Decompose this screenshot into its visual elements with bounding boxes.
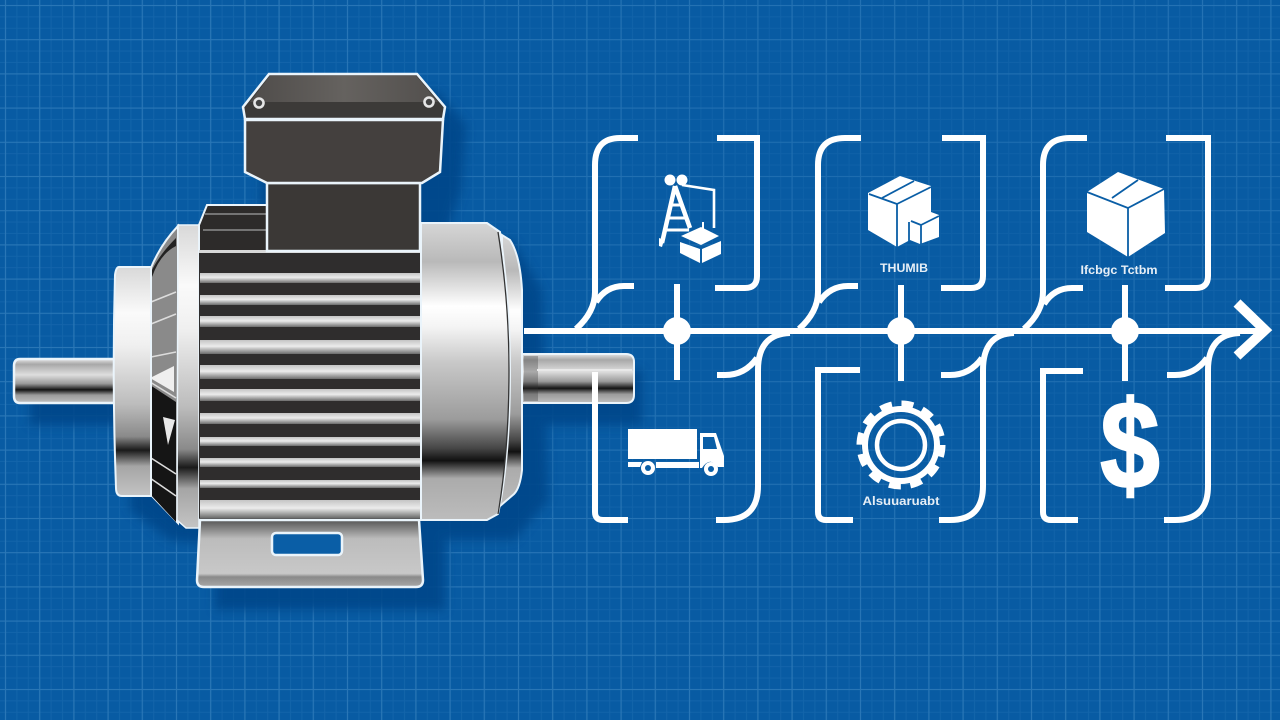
icon: boxes: [868, 176, 939, 247]
motor: right shaft: [522, 354, 634, 403]
icon: large box: [1087, 172, 1165, 257]
motor: collar: [177, 225, 199, 528]
motor: terminal box: [243, 74, 445, 183]
bracket: bottom 3: [1043, 333, 1240, 520]
bracket: top 2: [799, 138, 983, 329]
icon: crane lifting crate: [659, 174, 721, 263]
label: box icon 2: THUMIB: [880, 263, 928, 275]
value chain connector lines: [524, 138, 1266, 520]
icon: delivery truck: [628, 429, 724, 476]
node 2: [887, 285, 915, 381]
node 3: [1111, 285, 1139, 381]
motor: upper cooling fins: [199, 205, 268, 252]
node 1: [663, 284, 691, 380]
icon: terminal box screws: [254, 98, 434, 108]
bracket: top 3: [1024, 138, 1208, 329]
motor: front flange: [114, 267, 151, 496]
bracket: bottom 1: [595, 333, 790, 520]
icon: gear: [862, 406, 940, 484]
label: gear: Alsuuaruabt: [862, 496, 940, 508]
motor: fan housing: [150, 226, 178, 523]
electric motor: [14, 74, 634, 587]
motor: left shaft: [14, 359, 115, 403]
icon: dollar sign: $: [1100, 375, 1160, 515]
bracket: top 1: [576, 138, 757, 329]
motor: rear end bell: [421, 223, 522, 520]
motor drop shadow: [30, 92, 642, 610]
motor: terminal box neck: [267, 183, 420, 251]
main flow line with arrow: [524, 303, 1266, 356]
label: box icon 3: Ifcbgc Tctbm: [1080, 263, 1158, 277]
motor: mounting foot: [197, 520, 423, 587]
bracket: bottom 2: [818, 333, 1014, 520]
motor: finned stator body: [199, 250, 420, 520]
